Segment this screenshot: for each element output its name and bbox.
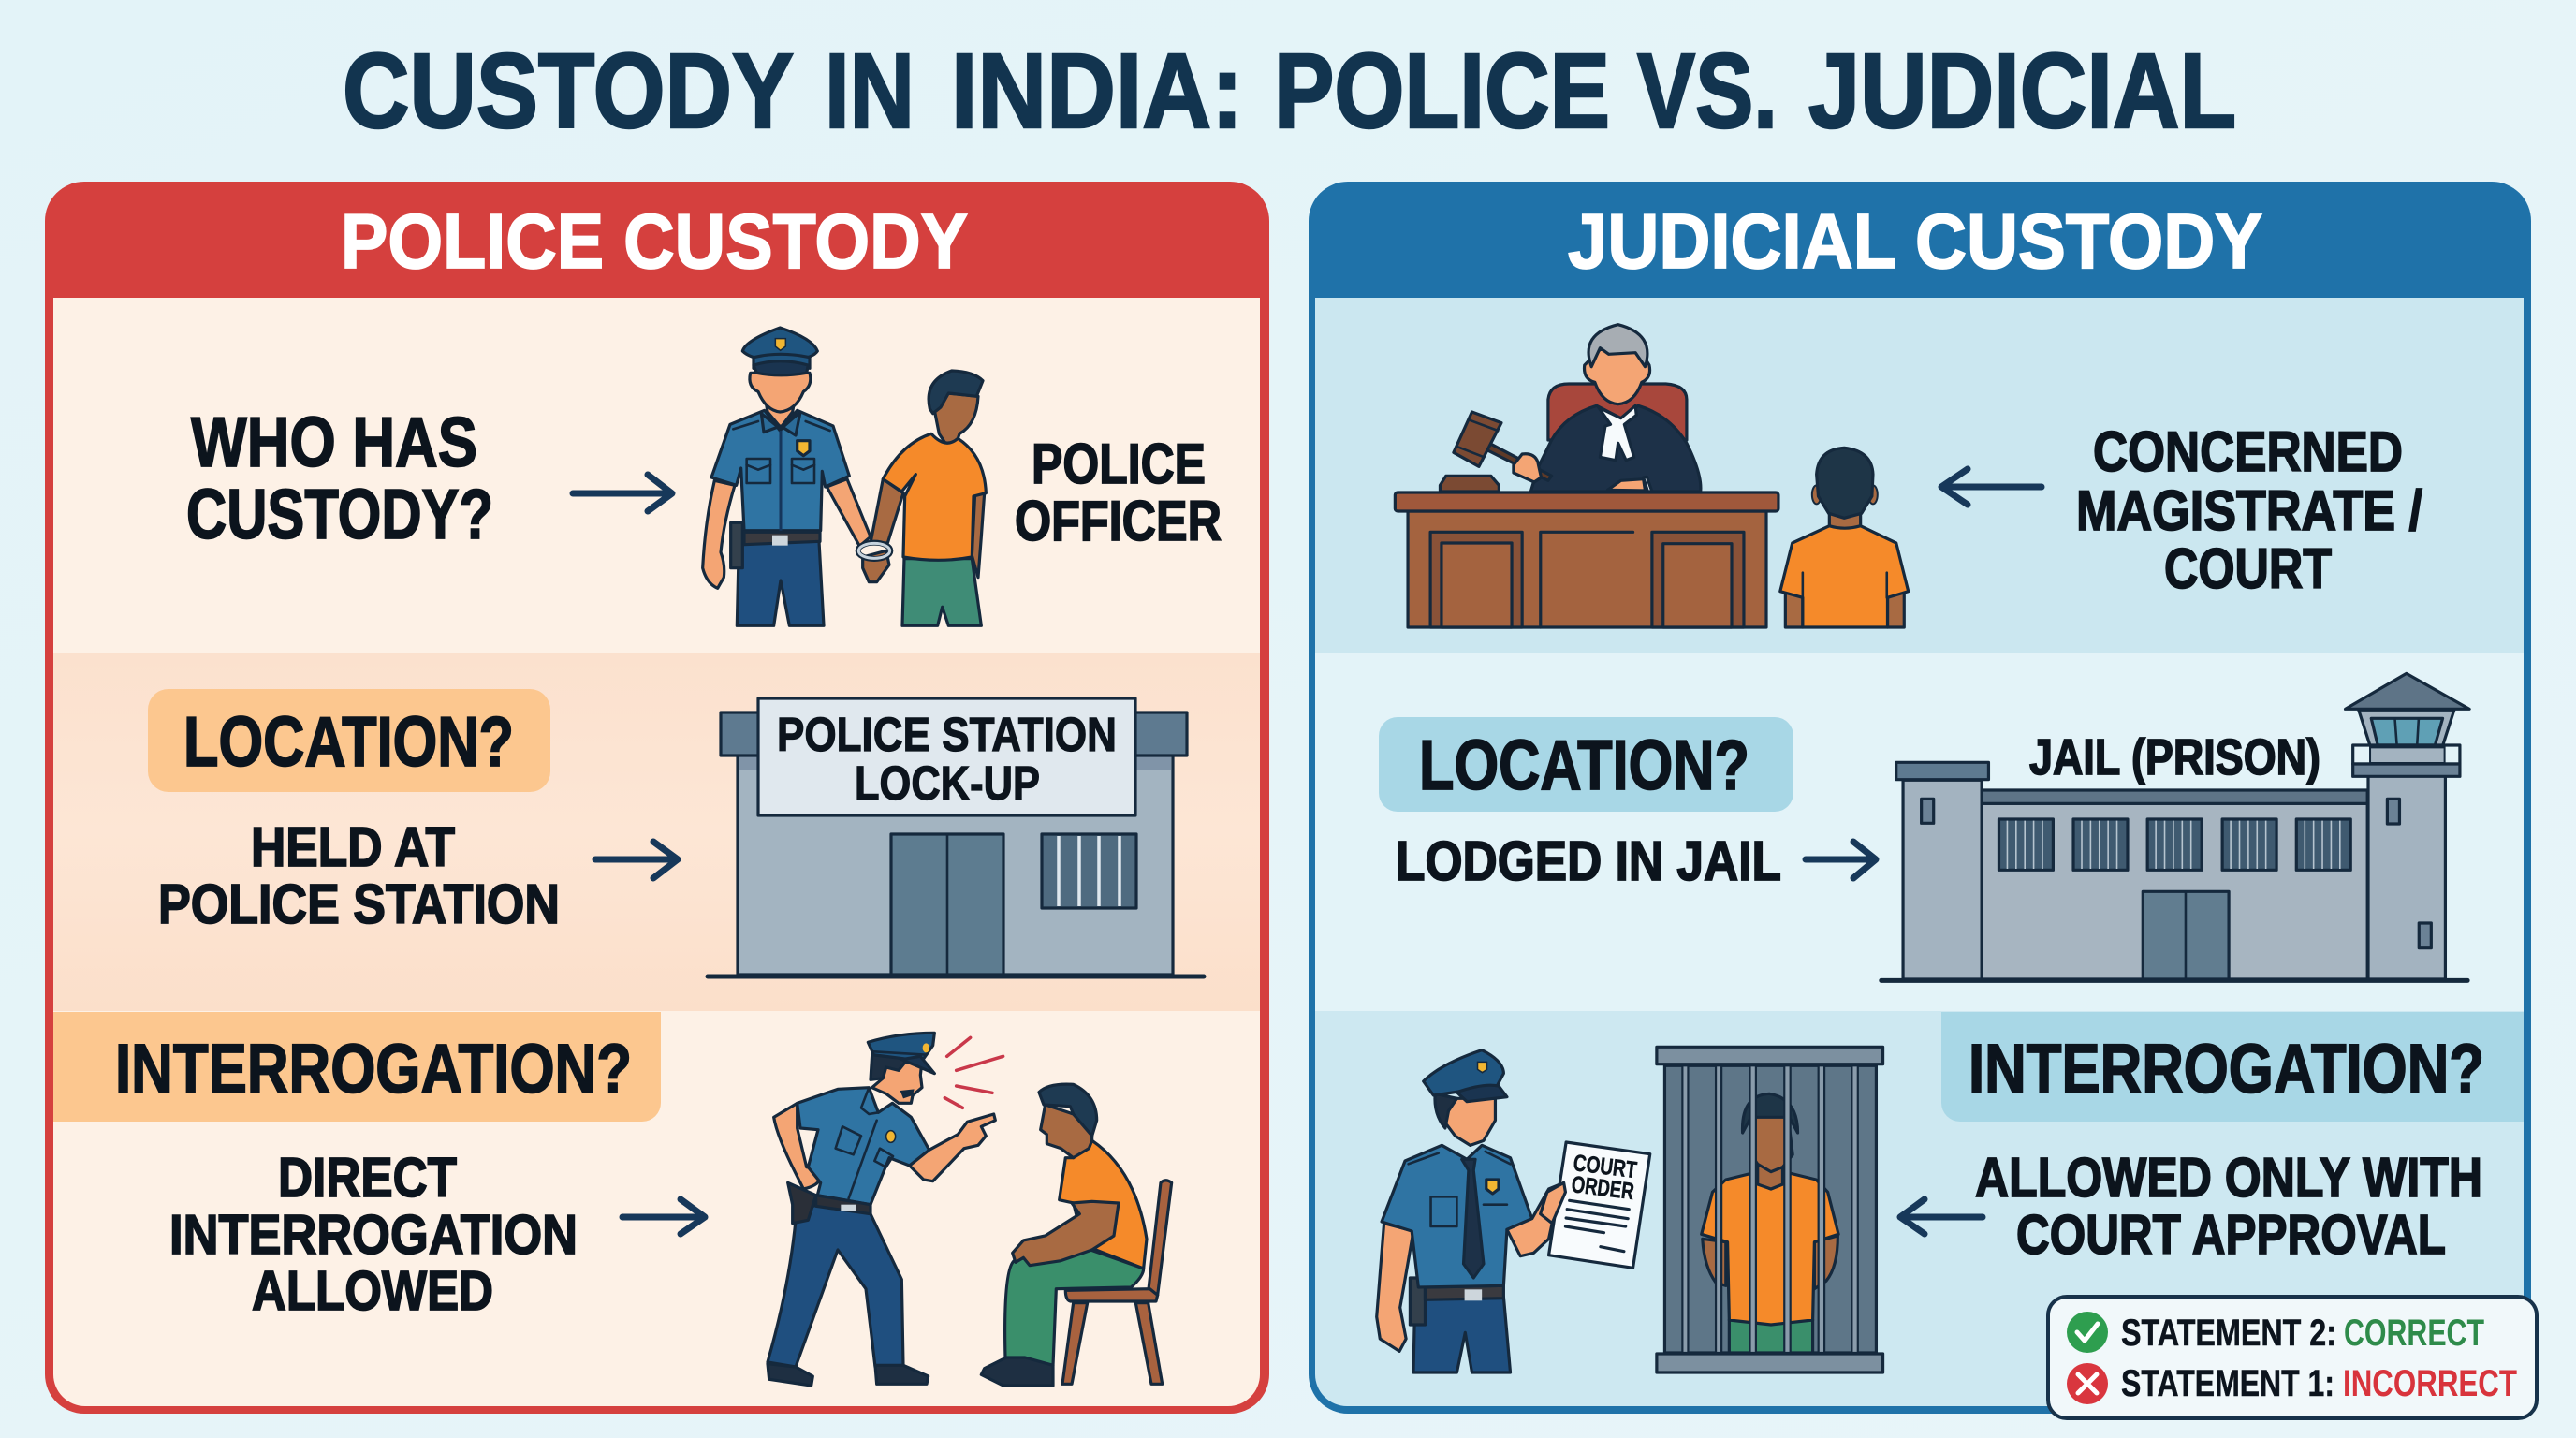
text: direct interrogation allowed: INTERROGATION [169,1204,578,1266]
label: location [148,689,550,792]
icon: officer interrogating seated prisoner [768,1033,1172,1386]
document text: court order [1570,1150,1638,1205]
label: location [1379,717,1793,812]
text: lodged in jail: LODGED IN JAIL [1396,830,1781,892]
text: concerned magistrate / court: MAGISTRATE / [2076,479,2422,542]
text: allowed only with court approval: ALLOWED ONLY WITH [1975,1147,2482,1209]
text: direct interrogation allowed: DIRECT [278,1147,457,1209]
text: concerned magistrate / court [2076,420,2422,600]
icon: jail with watchtower [1881,673,2469,980]
panel: judicial custody [1309,182,2537,1418]
text: statement 1 incorrect: INCORRECT [2343,1363,2517,1404]
text: police officer: OFFICER [1015,490,1222,552]
text: jail (prison): JAIL (PRISON) [2029,729,2320,785]
text: direct interrogation allowed: ALLOWED [252,1260,493,1322]
title: POLICE [1274,32,1610,150]
text: held at police station: HELD AT [251,816,455,878]
text: held at police station [158,816,560,935]
text: police officer [1015,433,1222,552]
document text: court order: ORDER [1570,1171,1635,1205]
document text: court order: COURT [1572,1150,1638,1183]
text: who has custody: WHO HAS [191,403,477,481]
label: interrogation [53,1012,661,1122]
text: concerned magistrate / court: COURT [2164,537,2332,600]
icon: red cross [2067,1363,2108,1404]
text: held at police station: POLICE STATION [158,873,560,935]
text: who has custody: CUSTODY? [186,475,493,553]
text: statement 2 correct: CORRECT [2344,1313,2484,1354]
text: who has custody [186,403,493,553]
text: concerned magistrate / court: CONCERNED [2093,420,2403,483]
sign text: POLICE STATION [777,708,1117,761]
title: VS. [1637,32,1778,150]
text: allowed only with court approval [1975,1147,2482,1266]
text: statement 1 incorrect: STATEMENT 1: [2121,1363,2334,1404]
icon: green check [2067,1312,2108,1353]
heading: judicial custody: JUDICIAL CUSTODY [1568,198,2262,285]
text: allowed only with court approval: COURT APPROVAL [2016,1204,2446,1266]
text: police officer: POLICE [1032,433,1206,495]
text: location: LOCATION? [1419,726,1749,804]
icon: police station lock-up [708,698,1204,976]
label: interrogation [1941,1012,2524,1122]
sign text: LOCK-UP [855,756,1040,810]
text: direct interrogation allowed [169,1147,578,1322]
text: interrogation: INTERROGATION? [115,1030,632,1108]
arrow: allowed only with [1900,1199,1983,1234]
arrow: direct interrogation [622,1199,705,1234]
heading: police custody: POLICE CUSTODY [341,198,968,285]
title: INDIA: [951,32,1243,150]
title [343,32,2236,150]
arrow: held at [595,842,678,878]
title: IN [825,32,915,150]
arrow: concerned magistrate [1941,469,2042,505]
icon: judge at bench with prisoner [1395,325,1909,627]
text: location: LOCATION? [183,702,514,781]
text: statement 2 correct: STATEMENT 2: [2121,1313,2336,1354]
sign text [777,708,1117,810]
title: JUDICIAL [1808,32,2236,150]
title: CUSTODY [343,32,794,150]
icon: officer with court order and prisoner behind bars [1377,1047,1883,1372]
panel: police custody [45,182,1269,1414]
arrow: who has custody [573,475,672,511]
icon: officer with handcuffed prisoner [703,328,986,625]
arrow: lodged in jail [1806,842,1876,878]
text: interrogation: INTERROGATION? [1969,1030,2484,1108]
callout: statement verdicts [2048,1297,2537,1418]
